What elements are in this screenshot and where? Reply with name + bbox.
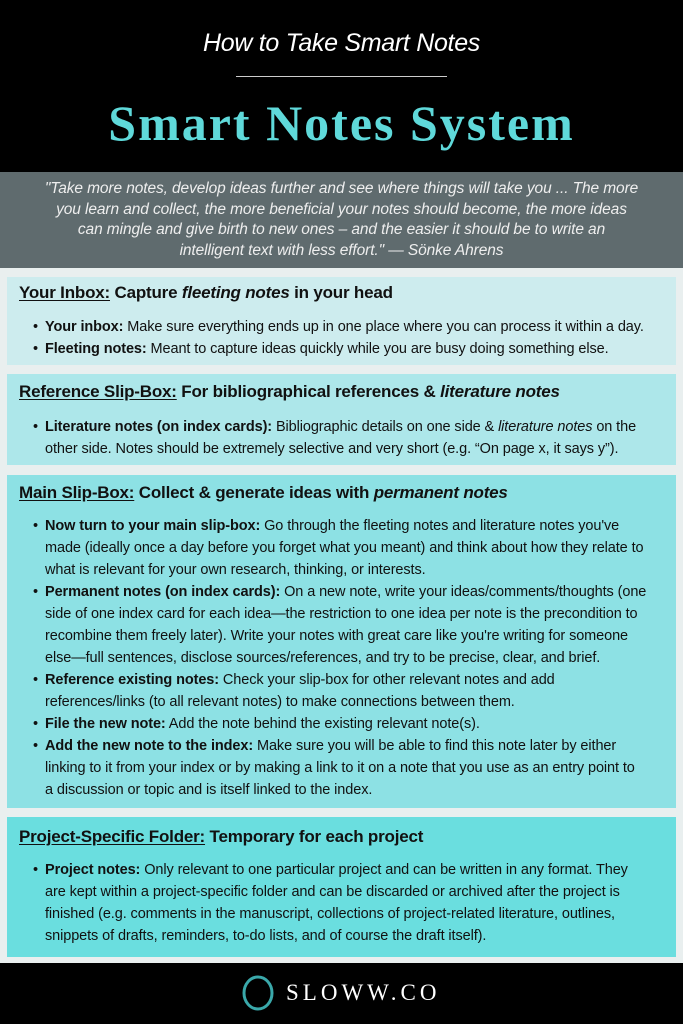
bullets: main [34, 518, 646, 798]
logo text: SLOWW.CO [286, 980, 440, 1005]
bullets: main: references/links (to all relevant notes) to make connections between them. [45, 694, 515, 710]
bullets: main: recombine them freely later). Write your notes with great care like you're writing for someone [45, 628, 628, 644]
panel: main slip-box [7, 475, 676, 808]
bullets: project: finished (e.g. comments in the manuscript, collections of project-related literature, outlines, [45, 906, 615, 922]
quote: intelligent text with less effort." — Sönke Ahrens [180, 242, 503, 258]
bullets: main: what is relevant for your own research, thinking, or interests. [45, 562, 426, 578]
heading: inbox: Your Inbox: Capture fleeting notes in your head [19, 283, 393, 302]
bullets: main: Reference existing notes: Check your slip-box for other relevant notes and add [45, 672, 555, 688]
bullets: reference [34, 419, 636, 457]
heading: main: Main Slip-Box: Collect & generate ideas with permanent notes [19, 483, 508, 502]
bullets: project: are kept within a project-specific folder and can be discarded or archived after the project is [45, 884, 620, 900]
panel: inbox [7, 277, 676, 365]
bullets: inbox [34, 319, 644, 357]
bullets: project: Project notes: Only relevant to one particular project and can be written in any format. They [45, 862, 628, 878]
bullets: main: Permanent notes (on index cards): On a new note, write your ideas/comments/thoughts (one [45, 584, 646, 600]
title: Smart Notes System [108, 95, 575, 151]
bullets: main: File the new note: Add the note behind the existing relevant note(s). [45, 716, 480, 732]
heading: reference: Reference Slip-Box: For bibliographical references & literature notes [19, 382, 560, 401]
panel: project folder [7, 817, 676, 957]
icon: logo ring [242, 976, 274, 1010]
bullets: reference: Literature notes (on index cards): Bibliographic details on one side & literature notes on the [45, 419, 636, 435]
bullets: main: a discussion or topic and is itself linked to the index. [45, 782, 372, 798]
header [0, 0, 683, 172]
quote: "Take more notes, develop ideas further and see where things will take you ... The more [45, 180, 638, 197]
footer [0, 963, 683, 1024]
subtitle: How to Take Smart Notes [203, 29, 480, 57]
bullets: reference: other side. Notes should be extremely selective and very short (e.g. “On page x, it says y”). [45, 441, 618, 457]
bullets: inbox: Fleeting notes: Meant to capture ideas quickly while you are busy doing something else. [45, 341, 609, 357]
bullets: main: made (ideally once a day before you forget what you meant) and think about how they relate to [45, 540, 643, 556]
bullets: main: else—full sentences, disclose sources/references, and try to be precise, clear, and brief. [45, 650, 600, 666]
quote: you learn and collect, the more beneficial your notes should become, the more ideas [56, 200, 627, 218]
quote: can mingle and give birth to new ones – and the easier it should be to write an [78, 221, 605, 238]
bullets: main: side of one index card for each idea—the restriction to one idea per note is the precondition to [45, 606, 638, 622]
bullets: inbox: Your inbox: Make sure everything ends up in one place where you can process it within a day. [45, 319, 644, 335]
bullets: main: Now turn to your main slip-box: Go through the fleeting notes and literature notes you've [45, 518, 619, 534]
bullets: main: Add the new note to the index: Make sure you will be able to find this note later by either [45, 738, 616, 754]
bullets: project: snippets of drafts, reminders, to-do lists, and of course the draft itself). [45, 928, 486, 944]
bullets: project [34, 862, 628, 944]
bullets: main: linking to it from your index or by making a link to it on a note that you use as an entry point to [45, 760, 635, 776]
quote [0, 172, 683, 268]
panel: reference slip-box [7, 374, 676, 465]
heading: project: Project-Specific Folder: Temporary for each project [19, 827, 423, 846]
